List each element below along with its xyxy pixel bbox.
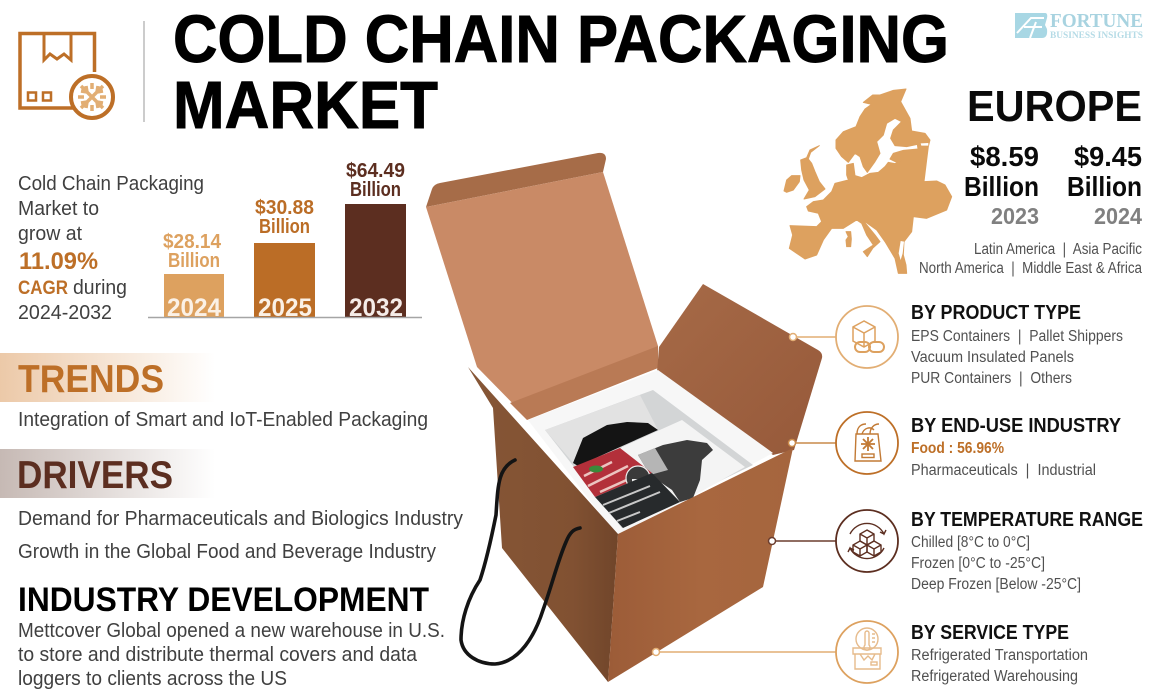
text block: market growth: grow at: [18, 223, 82, 245]
panel: drivers: DRIVERS: [17, 454, 173, 497]
segment: by end-use industry: Food : 56.96%: [911, 440, 1004, 457]
segment: by product type: EPS Containers | Pallet Shippers: [911, 328, 1123, 345]
lid top flap: [426, 153, 606, 207]
panel: drivers: Demand for Pharmaceuticals and Biologics Industry: [18, 508, 463, 530]
logo: Fortune Business Insights: FORTUNE: [1050, 11, 1143, 32]
stat: 2023: 2023: [991, 203, 1039, 229]
connector: product type: [790, 334, 836, 340]
panel: trends: Integration of Smart and IoT-Enabled Packaging: [18, 409, 428, 431]
panel: Europe statistics: EUROPE: [967, 82, 1142, 131]
bar 2024: [163, 231, 224, 322]
text block: market growth: [18, 173, 204, 324]
text block: market growth: 11.09%: [19, 248, 98, 275]
segment: by end-use industry: Pharmaceuticals | Industrial: [911, 462, 1096, 479]
segment: by product type: Vacuum Insulated Panels: [911, 349, 1074, 366]
logo: Fortune Business Insights: [1015, 11, 1143, 40]
segment: by service type: [911, 621, 1088, 685]
stat: 2023: Billion: [964, 171, 1039, 202]
panel: drivers: Growth in the Global Food and Beverage Industry: [18, 541, 436, 563]
segment: by service type: BY SERVICE TYPE: [911, 621, 1069, 644]
bar 2032: Billion: [350, 179, 401, 201]
text block: market growth: 2024-2032: [18, 302, 112, 324]
segment: by end-use industry: BY END-USE INDUSTRY: [911, 414, 1121, 437]
icon: box with snowflake: [20, 34, 113, 118]
divider: [143, 21, 145, 122]
icon: service type: [836, 621, 898, 683]
rope handle: [461, 460, 580, 664]
icon: end-use industry: [836, 412, 898, 474]
title: COLD CHAIN PACKAGING: [173, 2, 949, 77]
bull illustration: [638, 440, 713, 502]
panel: industry development: loggers to clients across the US: [18, 668, 287, 690]
stat: 2023: [964, 141, 1039, 229]
text block: market growth: Market to: [18, 198, 99, 220]
bar 2025: [254, 197, 315, 322]
bar 2025: 2025: [258, 294, 312, 322]
right panel: [608, 448, 793, 682]
text block: market growth: CAGR: [18, 278, 68, 299]
map: Europe: [784, 89, 952, 273]
panel: drivers: [0, 449, 463, 563]
stat: 2024: Billion: [1067, 171, 1142, 202]
bar 2025: Billion: [259, 216, 310, 238]
panel: industry development: INDUSTRY DEVELOPMENT: [18, 581, 429, 619]
bar 2032: $64.49: [346, 160, 405, 182]
lid panel: [426, 172, 658, 418]
segment: by service type: Refrigerated Transportation: [911, 647, 1088, 664]
text block: market growth: during: [73, 277, 127, 299]
bar 2024: $28.14: [163, 231, 222, 253]
segment: by temperature range: Chilled [8°C to 0°C]: [911, 534, 1030, 551]
segment: by product type: [911, 301, 1123, 387]
package label: [595, 473, 680, 528]
logo: Fortune Business Insights: BUSINESS INSIGHTS: [1050, 30, 1143, 40]
dark contents: [573, 422, 658, 466]
segment: by temperature range: Deep Frozen [Below -25°C]: [911, 576, 1081, 593]
other regions: [919, 241, 1142, 277]
right flap: [657, 284, 822, 455]
stat: 2023: $8.59: [970, 141, 1039, 172]
bar 2024: 2024: [167, 294, 221, 322]
illustration: open cardboard box: [426, 153, 822, 682]
connector: service type: [652, 648, 836, 656]
icon: temperature range: [836, 510, 898, 572]
segment: by end-use industry: [911, 414, 1121, 479]
lid crease band: [510, 346, 658, 420]
bar 2024: Billion: [168, 250, 220, 272]
stat: 2024: $9.45: [1074, 141, 1142, 172]
red meat: [573, 448, 652, 497]
panel: industry development: to store and distribute thermal covers and data: [18, 644, 418, 666]
connector: end-use industry: [788, 440, 836, 446]
bar 2025: $30.88: [255, 197, 314, 219]
segment: by product type: BY PRODUCT TYPE: [911, 301, 1081, 324]
segment: by temperature range: [911, 508, 1143, 593]
meat package white: [590, 420, 745, 528]
panel: industry development: [18, 581, 445, 690]
bar chart: [148, 160, 422, 322]
British Isles: [784, 146, 825, 199]
segment: by temperature range: Frozen [0°C to -25°C]: [911, 555, 1045, 572]
segment: by product type: PUR Containers | Others: [911, 370, 1072, 387]
panel: trends: [0, 353, 428, 431]
title: MARKET: [173, 68, 438, 143]
left panel: [468, 367, 618, 682]
bar 2032: 2032: [349, 294, 403, 322]
panel: trends: TRENDS: [18, 358, 164, 401]
stat: 2024: [1067, 141, 1142, 229]
icon: product type: [836, 306, 898, 368]
text block: market growth: Cold Chain Packaging: [18, 173, 204, 195]
segment: by service type: Refrigerated Warehousing: [911, 668, 1078, 685]
panel: industry development: Mettcover Global opened a new warehouse in U.S.: [18, 620, 445, 642]
connector: temperature range: [768, 538, 836, 544]
foam tray: [528, 370, 773, 536]
panel: Europe statistics: [919, 82, 1142, 277]
bar 2032: [345, 160, 406, 322]
stat: 2024: 2024: [1094, 203, 1142, 229]
title: [173, 2, 949, 143]
